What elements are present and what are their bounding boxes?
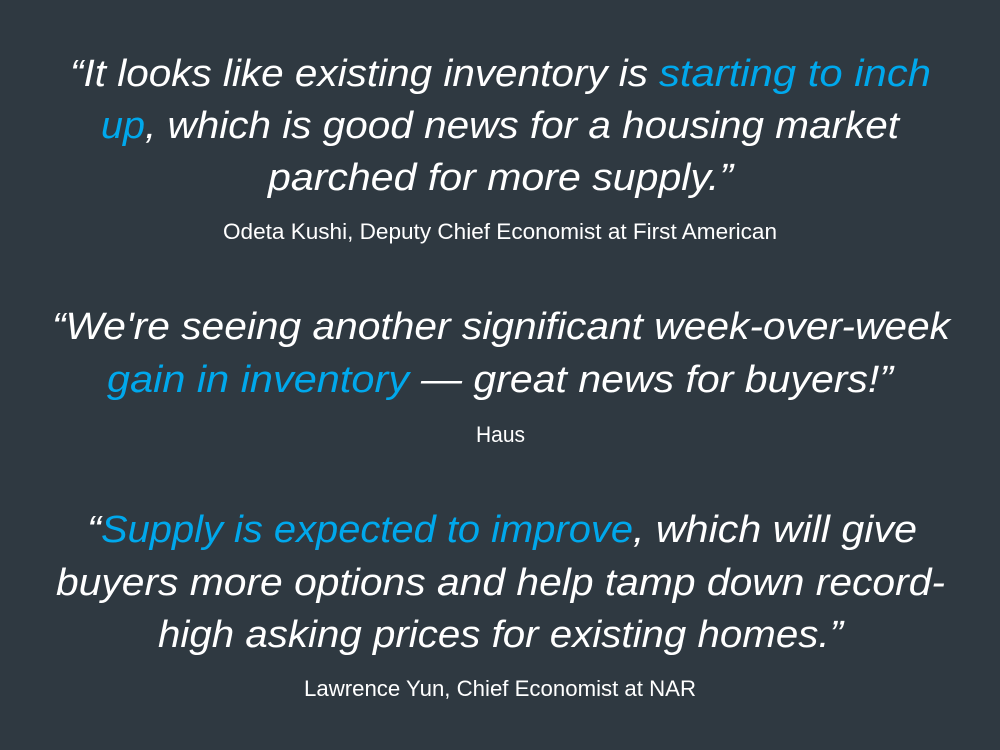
quote 1: Odeta Kushi: “It looks like existing inventory is <box>70 53 648 95</box>
quote 1: Odeta Kushi: up <box>101 105 145 147</box>
quote 2: Haus: “We're seeing another significant week-over-week <box>52 306 952 348</box>
quote 1: Odeta Kushi: , which is good news for a housing market <box>145 105 901 147</box>
quote 2: Haus: gain in inventory <box>107 359 411 401</box>
quote 3: Lawrence Yun: Supply is expected to improve <box>101 509 633 551</box>
attribution: Haus: Haus <box>476 422 525 447</box>
quote 3: Lawrence Yun <box>56 509 945 656</box>
quote 1: Odeta Kushi: starting to inch <box>659 53 931 95</box>
quote 3: Lawrence Yun: high asking prices for existing homes.” <box>158 614 845 656</box>
quote 2: Haus: — great news for buyers!” <box>420 359 896 401</box>
quote 3: Lawrence Yun: buyers more options and help tamp down record- <box>56 562 945 604</box>
attribution: Odeta Kushi: Odeta Kushi, Deputy Chief Economist at First American <box>223 219 777 244</box>
quote 1: Odeta Kushi: parched for more supply.” <box>267 157 736 199</box>
quote 2: Haus <box>52 306 952 401</box>
quote 1: Odeta Kushi <box>70 53 931 199</box>
attribution: Lawrence Yun: Lawrence Yun, Chief Economist at NAR <box>304 676 696 701</box>
quote 3: Lawrence Yun: “ <box>87 509 104 551</box>
quote 3: Lawrence Yun: , which will give <box>633 509 917 551</box>
